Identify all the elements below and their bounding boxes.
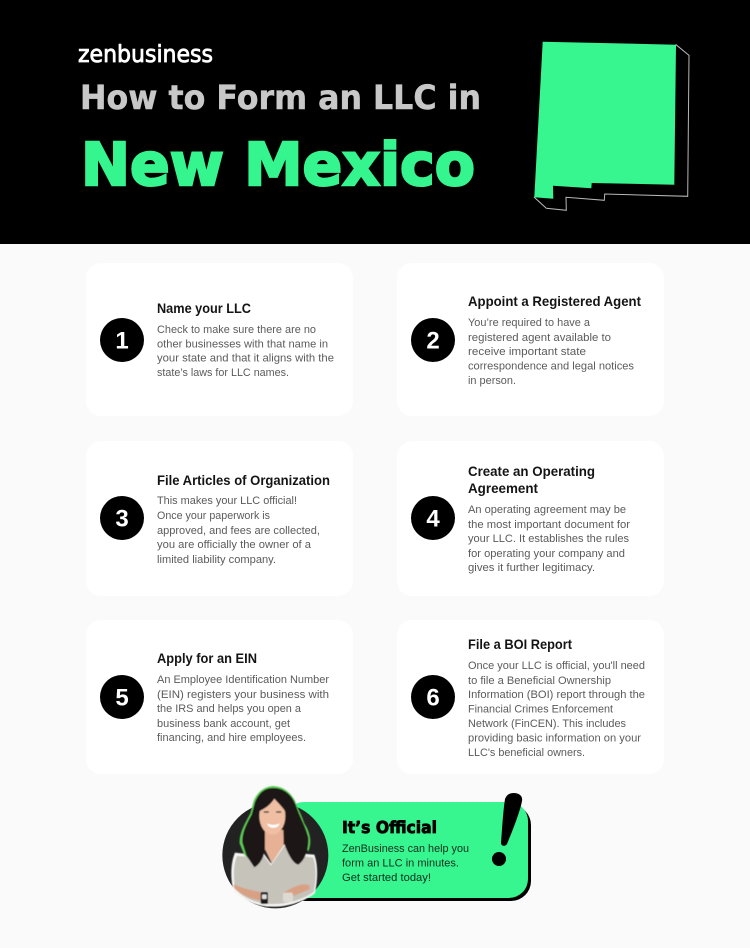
panel: step 2 — [397, 263, 664, 416]
text: step 4 description: gives it further legitimacy. — [468, 562, 595, 574]
heading: how to form an LLC in: How to Form an LLC in — [80, 78, 481, 117]
eyes — [264, 811, 269, 813]
text: step 3 description: limited liability company. — [157, 554, 276, 566]
smile — [267, 823, 280, 828]
text: step 2 description: correspondence and legal notices — [468, 360, 634, 372]
fringe — [259, 795, 286, 813]
icon: exclamation mark — [492, 793, 522, 866]
text: step 4 description: your LLC. It establishes the rules — [468, 533, 629, 545]
text: step 3 description: Once your paperwork is — [157, 510, 270, 522]
text: step 5 description: (EIN) registers your business with — [157, 689, 329, 701]
icon: number 3: 3 — [115, 506, 129, 532]
text: step 6 description: Once your LLC is official, you'll need — [468, 660, 645, 672]
logo: zenbusiness: zenbusiness — [78, 40, 213, 68]
panel: step 5 — [86, 620, 353, 774]
text: step 4 description — [468, 504, 630, 574]
neck — [265, 830, 284, 863]
text: step 3 description: you are officially the owner of a — [157, 539, 311, 551]
text: step 3 description: This makes your LLC official! — [157, 495, 297, 507]
text: step 1 description: your state and that it aligns with the — [157, 353, 334, 365]
text: callout body: Get started today! — [342, 872, 431, 884]
text: step 5 description: the IRS and helps you open a — [157, 703, 301, 715]
heading: step 4 — [468, 463, 595, 496]
text: step 6 description: Network (FinCEN). This includes — [468, 718, 626, 730]
heading: step 1: Name your LLC — [157, 300, 251, 316]
heading: step 3: File Articles of Organization — [157, 472, 330, 488]
heading: step 4: Create an Operating — [468, 463, 595, 479]
text: step 6 description: Financial Crimes Enforcement — [468, 704, 613, 716]
text: step 6 description — [468, 660, 645, 759]
text: step 1 description: other businesses with that name in — [157, 338, 328, 350]
text: callout body — [342, 843, 469, 884]
hair — [242, 788, 308, 867]
text: step 2 description — [468, 317, 634, 387]
text: It's Official heading: It’s Official — [342, 818, 437, 837]
illustration: portrait of businesswoman — [222, 786, 328, 908]
text: step 6 description: LLC's beneficial owners. — [468, 747, 585, 759]
panel: step 3 — [86, 441, 353, 596]
heading: step 6: File a BOI Report — [468, 636, 572, 652]
icon: number 2: 2 — [426, 328, 440, 354]
text: step 6 description: Information (BOI) report through the — [468, 689, 645, 701]
icon: number 5: 5 — [115, 684, 129, 712]
icon: number 1: 1 — [115, 328, 129, 354]
text: step 1 description — [157, 324, 334, 379]
heading: New Mexico: New Mexico — [81, 130, 475, 199]
text: step 4 description: An operating agreement may be — [468, 504, 626, 516]
icon: number 3 — [100, 496, 144, 540]
panel: step 4 — [397, 441, 664, 596]
text: callout body: form an LLC in minutes. — [342, 858, 459, 870]
heading: step 4: Agreement — [468, 480, 538, 496]
icon: number 1 — [100, 318, 144, 362]
text: step 5 description: An Employee Identification Number — [157, 674, 329, 686]
text: callout body: ZenBusiness can help you — [342, 843, 469, 855]
text: step 1 description: Check to make sure there are no — [157, 324, 316, 336]
heading: step 5: Apply for an EIN — [157, 650, 257, 666]
crossed arms — [234, 884, 265, 901]
shirt — [231, 844, 317, 907]
text: step 5 description: financing, and hire employees. — [157, 732, 306, 744]
icon: number 6: 6 — [426, 684, 440, 712]
icon: number 4: 4 — [426, 506, 440, 532]
text: step 2 description: You’re required to have a — [468, 317, 590, 329]
text: step 6 description: to file a Beneficial Ownership — [468, 675, 611, 687]
watch — [261, 892, 268, 904]
panel: step 6 — [397, 620, 664, 774]
heading: step 2: Appoint a Registered Agent — [468, 293, 641, 309]
text: step 4 description: for operating your company and — [468, 548, 625, 560]
icon: number 5 — [100, 675, 144, 719]
face — [259, 797, 285, 835]
text: step 3 description — [157, 495, 320, 566]
panel: step 1 — [86, 263, 353, 416]
text: step 2 description: in person. — [468, 375, 516, 387]
text: step 3 description: approved, and fees are collected, — [157, 525, 320, 537]
icon: number 4 — [411, 496, 455, 540]
text: step 2 description: receive important state — [468, 346, 586, 358]
text: step 5 description: business bank account, get — [157, 718, 290, 730]
text: step 1 description: state’s laws for LLC names. — [157, 367, 289, 379]
text: step 6 description: providing basic information on your — [468, 732, 641, 744]
icon: number 6 — [411, 675, 455, 719]
text: step 5 description — [157, 674, 329, 744]
hair outline glow — [240, 786, 310, 858]
panel: header — [0, 0, 750, 244]
text: step 4 description: the most important document for — [468, 519, 630, 531]
icon: New Mexico state map — [534, 42, 689, 210]
callout: It's Official — [222, 786, 531, 908]
text: step 2 description: registered agent available to — [468, 332, 611, 344]
icon: number 2 — [411, 318, 455, 362]
